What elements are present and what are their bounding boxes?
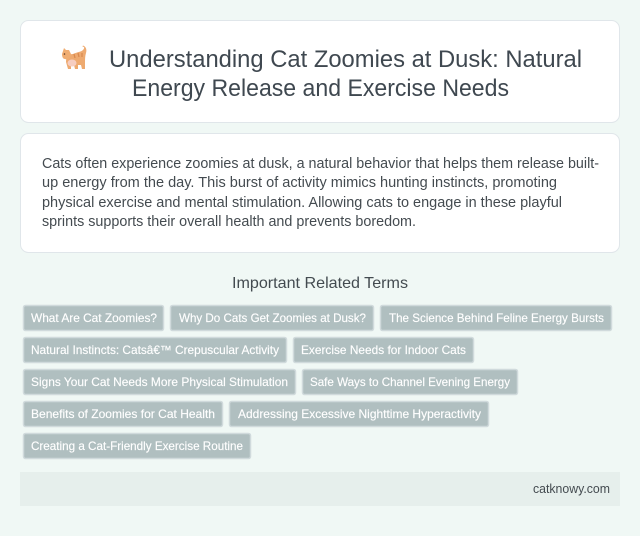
title line 1: Understanding Cat Zoomies at Dusk: Natural	[109, 46, 582, 73]
tag: the science: The Science Behind Feline Energy Bursts	[389, 311, 604, 325]
tag: what are zoomies: What Are Cat Zoomies?	[31, 311, 157, 325]
tag: routine	[24, 434, 250, 458]
footer	[20, 472, 620, 506]
panel: description card	[20, 134, 620, 252]
tag: natural instincts: Natural Instincts: Catsâ€™ Crepuscular Activity	[31, 343, 279, 357]
heading: related terms: Important Related Terms	[232, 275, 408, 292]
tag: what are zoomies	[24, 306, 164, 330]
tag: the science	[380, 306, 612, 330]
footer source: catknowy.com	[533, 481, 610, 496]
description text: physical exercise and mental stimulation. Allowing cats to engage in these playful	[42, 195, 562, 211]
panel: title card	[20, 20, 620, 122]
tag: signs: Signs Your Cat Needs More Physical Stimulation	[31, 375, 288, 389]
tag: addressing	[230, 402, 488, 426]
tag: signs	[24, 370, 296, 394]
description text: sprints supports their overall health and prevents boredom.	[42, 214, 416, 230]
icon: cat	[62, 46, 86, 69]
tag: exercise needs: Exercise Needs for Indoor Cats	[301, 343, 466, 357]
title line 2: Energy Release and Exercise Needs	[132, 75, 509, 102]
description text	[42, 156, 599, 230]
tag: routine: Creating a Cat-Friendly Exercise Routine	[31, 439, 243, 453]
tag: safe ways	[302, 370, 518, 394]
tag: why at dusk	[170, 306, 374, 330]
tag: exercise needs	[294, 338, 474, 362]
tag list	[24, 306, 612, 458]
tag: safe ways: Safe Ways to Channel Evening Energy	[310, 375, 510, 389]
tag: benefits	[24, 402, 222, 426]
description text: Cats often experience zoomies at dusk, a natural behavior that helps them release built-	[42, 156, 599, 172]
tag: addressing: Addressing Excessive Nighttime Hyperactivity	[238, 407, 481, 421]
tag: why at dusk: Why Do Cats Get Zoomies at Dusk?	[179, 311, 366, 325]
tag: natural instincts	[24, 338, 286, 362]
description text: up energy from the day. This burst of activity mimics hunting instincts, promoting	[42, 175, 557, 191]
tag: benefits: Benefits of Zoomies for Cat Health	[31, 407, 215, 421]
